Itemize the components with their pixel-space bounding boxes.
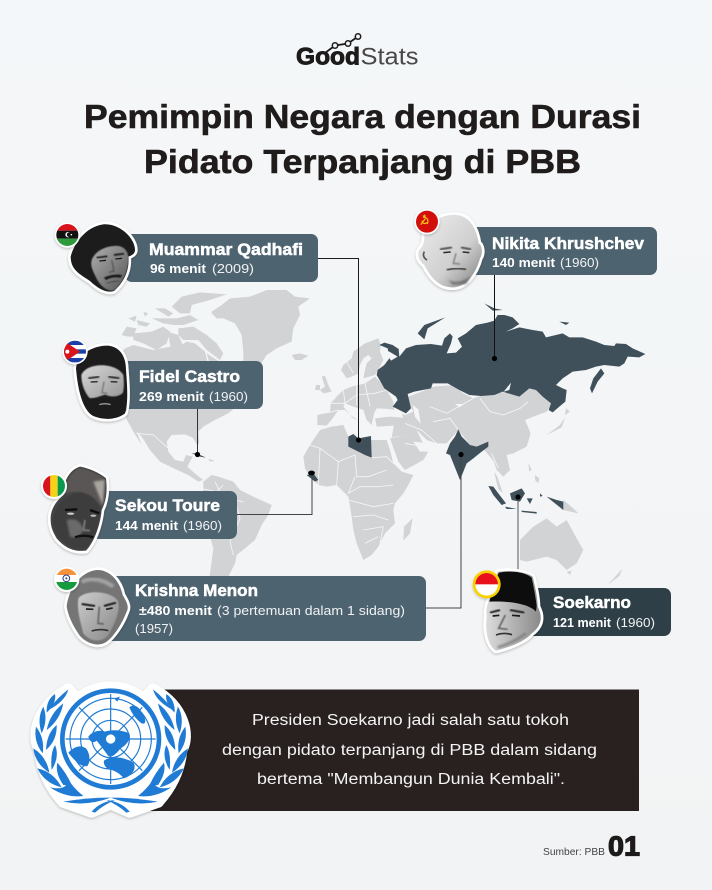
panel: Soekarno [525, 588, 671, 636]
panel: Sekou Toure [92, 491, 237, 539]
flag: India [54, 567, 79, 592]
map: New Zealand [608, 568, 623, 585]
title: Pidato Terpanjang di PBB [144, 144, 581, 181]
panel: Sekou Toure: 144 menit [115, 518, 179, 533]
panel: Nikita Khrushchev [470, 227, 657, 275]
panel: Muammar Qadhafi: (2009) [212, 261, 254, 276]
panel: Soekarno: Soekarno [553, 593, 631, 612]
highlighted country: Cuba [192, 453, 206, 458]
panel: Sekou Toure: Sekou Toure [115, 496, 220, 515]
emblem left laurel [33, 689, 115, 813]
portrait: Krishna Menon [67, 570, 128, 644]
source note: Sumber: PBB [543, 846, 605, 858]
world map [110, 290, 645, 585]
flag: Soviet Union [414, 209, 440, 234]
panel: Nikita Khrushchev: Nikita Khrushchev [492, 234, 645, 253]
connector: Khrushchev to Russia [492, 275, 497, 361]
portrait: Soekarno [486, 571, 541, 651]
panel: Krishna Menon: Krishna Menon [135, 581, 258, 600]
highlighted country: India [446, 429, 488, 480]
highlighted country: Libya [348, 434, 372, 458]
emblem globe [62, 691, 159, 787]
connector: Castro to Cuba [195, 409, 200, 457]
connector: Soekarno to Indonesia [515, 494, 521, 575]
callout banner: bertema "Membangun Dunia Kembali". [257, 771, 565, 788]
panel: Fidel Castro: Fidel Castro [139, 367, 240, 386]
map: Americas [125, 409, 272, 585]
panel: Fidel Castro: 269 menit [139, 389, 205, 404]
highlighted country: Indonesia [488, 486, 563, 514]
flag: Guinea [41, 473, 67, 499]
map: Africa, Asia, Oceania [303, 385, 583, 575]
flag: Cuba [62, 339, 88, 364]
panel: Soekarno: (1960) [616, 615, 655, 630]
panel: Muammar Qadhafi [125, 234, 318, 282]
flag: Libya [55, 222, 80, 248]
connector: Qadhafi to Libya [318, 258, 361, 443]
logo: GoodStats: Stats [360, 44, 418, 70]
highlighted country: Russia [377, 303, 645, 413]
highlighted country: Guinea [307, 473, 318, 482]
panel: Nikita Khrushchev: 140 menit [492, 255, 556, 270]
panel: Soekarno: 121 menit [553, 615, 612, 630]
emblem sticker backing [36, 687, 185, 812]
page number: 01 [608, 830, 640, 862]
icon: United Nations emblem [33, 687, 188, 813]
connector: Toure to Guinea [237, 471, 315, 514]
panel: Sekou Toure: (1960) [183, 518, 222, 533]
panel: Krishna Menon [105, 576, 426, 641]
logo: GoodStats [296, 34, 418, 70]
emblem right laurel [106, 689, 188, 813]
panel: Muammar Qadhafi: 96 menit [150, 261, 207, 276]
callout banner [150, 690, 639, 811]
connector: Menon to India [426, 452, 464, 608]
portrait: Muammar Qadhafi [71, 224, 135, 292]
portrait: Fidel Castro [76, 346, 127, 419]
callout banner: dengan pidato terpanjang di PBB dalam sidang [222, 742, 597, 759]
panel: Krishna Menon: ±480 menit [139, 603, 213, 618]
logo: GoodStats: Good [296, 44, 360, 70]
title: Pemimpin Negara dengan Durasi [84, 99, 641, 136]
callout banner: Presiden Soekarno jadi salah satu tokoh [252, 712, 569, 729]
panel: Fidel Castro [115, 361, 263, 409]
title [84, 99, 641, 181]
panel: Nikita Khrushchev: (1960) [560, 255, 599, 270]
map: Canada, Greenland and Arctic islands [110, 290, 310, 365]
panel: Fidel Castro: (1960) [209, 389, 248, 404]
panel: Muammar Qadhafi: Muammar Qadhafi [149, 240, 303, 259]
map: Europe [315, 338, 410, 427]
panel: Krishna Menon: (1957) [135, 621, 173, 636]
panel: Krishna Menon: (3 pertemuan dalam 1 sidang) [217, 603, 405, 618]
portrait: Sekou Toure [51, 467, 107, 551]
flag: Indonesia [473, 570, 501, 598]
portrait: Nikita Khrushchev [418, 215, 482, 287]
